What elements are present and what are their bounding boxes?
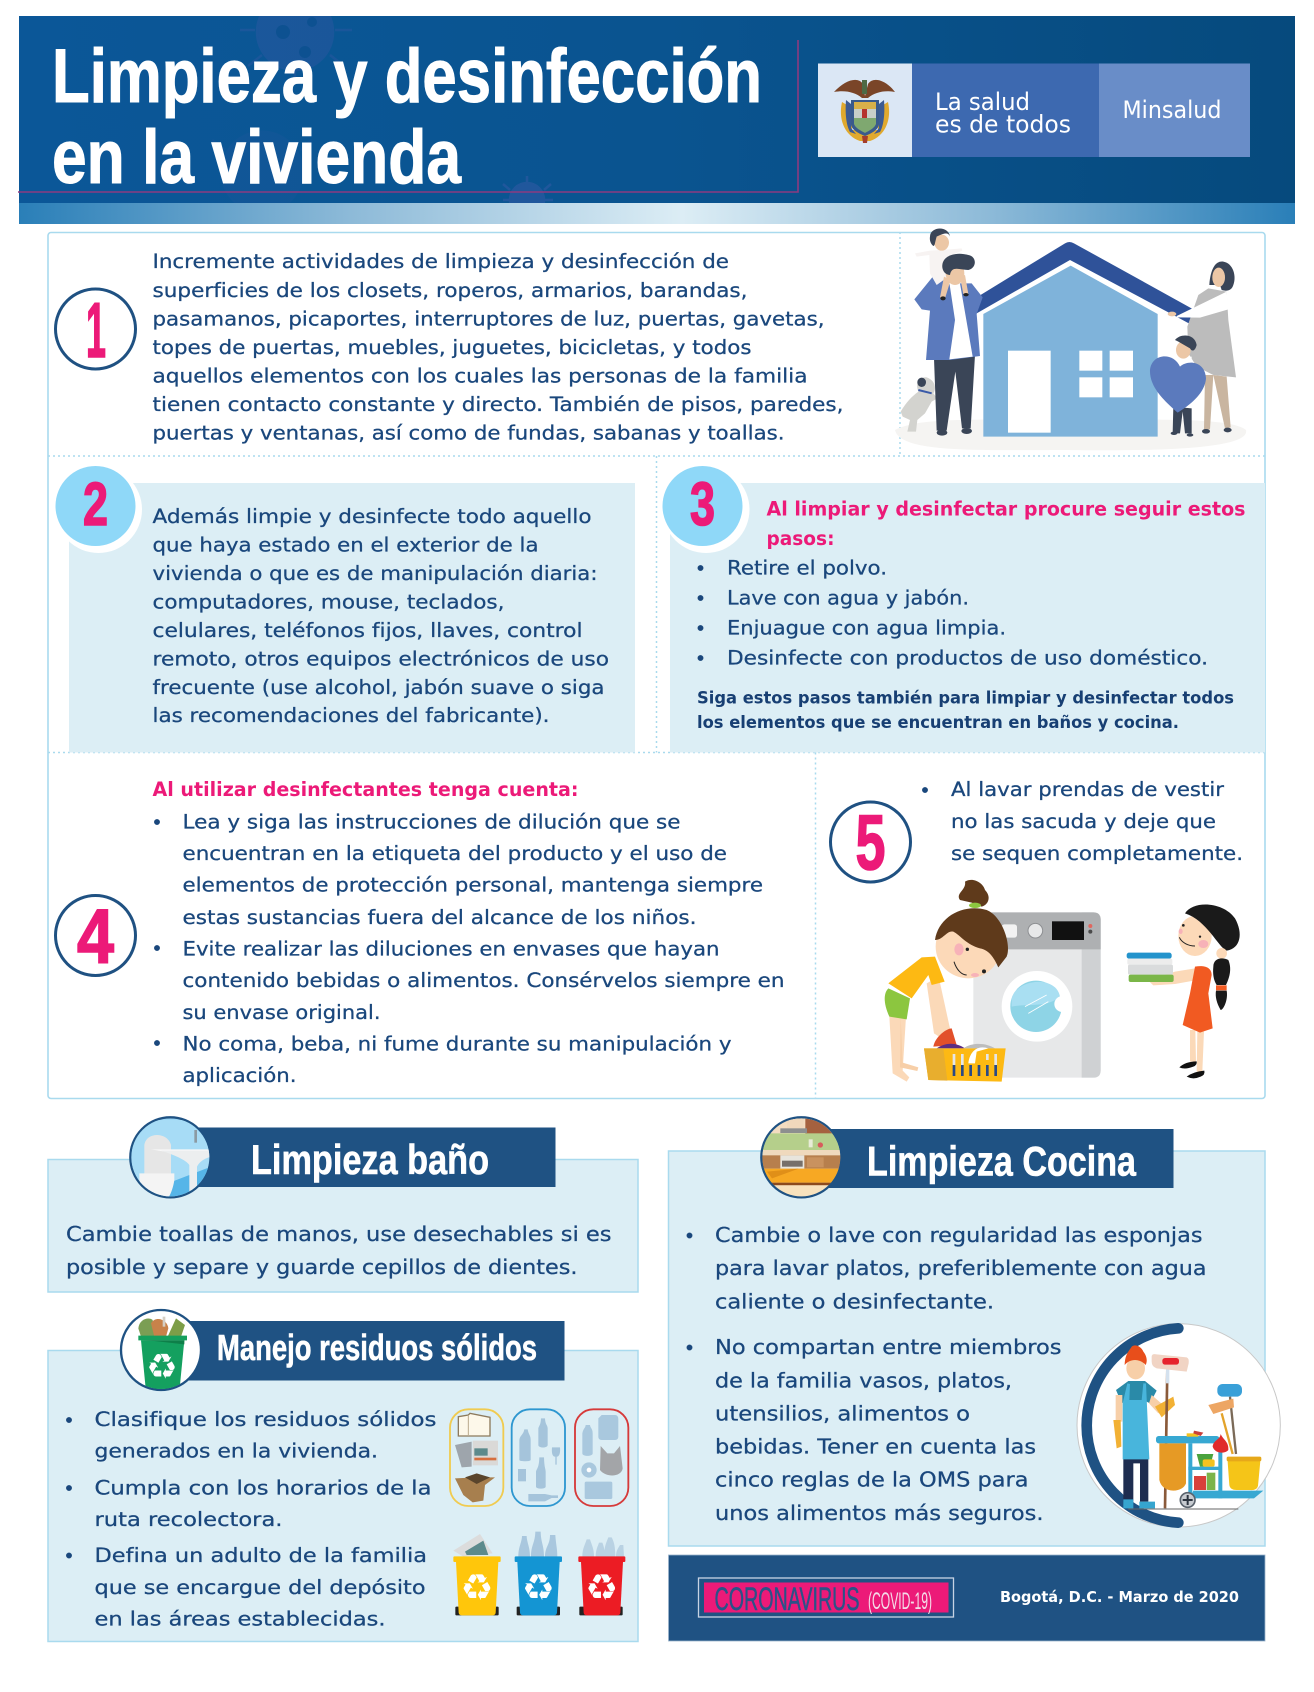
heading 3: Al limpiar y desinfectar procure seguir estos bbox=[766, 498, 1246, 520]
list: cocina: de la familia vasos, platos, bbox=[715, 1368, 1012, 1392]
illustration: waste types and recycling bins: ♻ bbox=[522, 1566, 555, 1609]
number 1 badge: 1 bbox=[86, 286, 106, 374]
icon: virus decorations bbox=[240, 16, 553, 203]
panel 4 bbox=[56, 778, 784, 1087]
number 4 badge bbox=[56, 894, 136, 980]
text block 1: Incremente actividades de limpieza y desinfección de bbox=[152, 250, 729, 273]
list: cocina: utensilios, alimentos o bbox=[715, 1402, 970, 1426]
note 3 bbox=[697, 688, 1234, 732]
icon: kitchen bbox=[760, 1117, 844, 1199]
list 4: encuentran en la etiqueta del producto y el uso de bbox=[182, 842, 727, 865]
footer bar bbox=[668, 1555, 1265, 1641]
icon: organic waste bin bbox=[121, 1310, 201, 1392]
number 5 badge bbox=[830, 798, 910, 886]
text block 5: se sequen completamente. bbox=[951, 842, 1243, 865]
list 4: su envase original. bbox=[182, 1001, 380, 1024]
note 3: los elementos que se encuentran en baños y cocina. bbox=[697, 713, 1179, 732]
note 3: Siga estos pasos también para limpiar y desinfectar todos bbox=[697, 688, 1234, 708]
number 3 badge bbox=[662, 466, 750, 553]
text block 2: computadores, mouse, teclados, bbox=[152, 590, 504, 614]
text block 1: pasamanos, picaportes, interruptores de luz, puertas, gavetas, bbox=[152, 307, 825, 330]
panel 5 bbox=[830, 778, 1243, 1082]
list: residuos: que se encargue del depósito bbox=[94, 1576, 426, 1599]
main content frame bbox=[48, 229, 1265, 1098]
heading 3 bbox=[766, 498, 1246, 550]
text block 2: frecuente (use alcohol, jabón suave o siga bbox=[152, 676, 604, 699]
title: en la vivienda bbox=[52, 115, 462, 200]
list: cocina: para lavar platos, preferiblemente con agua bbox=[715, 1256, 1206, 1280]
list: residuos: generados en la vivienda. bbox=[94, 1440, 378, 1462]
heading bar: Manejo residuos sólidos bbox=[180, 1321, 564, 1380]
title bbox=[52, 34, 762, 200]
heading bar: Limpieza baño: Limpieza baño bbox=[251, 1136, 489, 1183]
logo block: Minsalud: La salud bbox=[935, 88, 1030, 116]
list: residuos bbox=[66, 1408, 436, 1630]
number 3 badge: 3 bbox=[690, 470, 715, 538]
list: cocina bbox=[687, 1223, 1206, 1525]
list 4: aplicación. bbox=[182, 1064, 296, 1087]
panel 2 bbox=[55, 466, 635, 752]
text: baño: posible y separe y guarde cepillos de dientes. bbox=[66, 1255, 578, 1279]
text block 1 bbox=[152, 250, 844, 444]
heading bar: Manejo residuos sólidos: Manejo residuos sólidos bbox=[217, 1327, 537, 1368]
text block 2: celulares, teléfonos fijos, llaves, control bbox=[152, 619, 582, 642]
logo block: Minsalud: es de todos bbox=[935, 110, 1071, 138]
illustration: waste types and recycling bins: ♻ bbox=[585, 1566, 618, 1609]
coronavirus label: CORONAVIRUS bbox=[714, 1581, 860, 1617]
text block 2 bbox=[152, 505, 609, 727]
text block 1: puertas y ventanas, así como de fundas, sabanas y toallas. bbox=[152, 422, 784, 444]
heading 4: Al utilizar desinfectantes tenga cuenta: bbox=[152, 778, 578, 801]
list: cocina: unos alimentos más seguros. bbox=[715, 1501, 1044, 1525]
logo block: Minsalud: Minsalud bbox=[1122, 96, 1222, 124]
number 2 badge: 2 bbox=[83, 470, 108, 538]
list 3: Enjuague con agua limpia. bbox=[727, 616, 1006, 640]
list: residuos: Defina un adulto de la familia bbox=[94, 1544, 427, 1567]
list 3: Lave con agua y jabón. bbox=[727, 586, 969, 610]
title: Limpieza y desinfección bbox=[52, 34, 762, 119]
panel: Limpieza baño bbox=[48, 1117, 638, 1292]
text block 5: Al lavar prendas de vestir bbox=[951, 778, 1225, 801]
list 4: No coma, beba, ni fume durante su manipulación y bbox=[182, 1032, 732, 1055]
number 4 badge: 4 bbox=[77, 894, 114, 980]
illustration: family and house bbox=[895, 229, 1246, 450]
text block 2: vivienda o que es de manipulación diaria: bbox=[152, 562, 598, 585]
number 1 badge bbox=[56, 286, 136, 374]
panel 3 bbox=[662, 466, 1265, 752]
text block 2: Además limpie y desinfecte todo aquello bbox=[152, 505, 592, 528]
list: cocina: caliente o desinfectante. bbox=[715, 1290, 994, 1314]
list: residuos: en las áreas establecidas. bbox=[94, 1608, 386, 1630]
text block 1: aquellos elementos con los cuales las personas de la familia bbox=[152, 364, 808, 388]
list 4: estas sustancias fuera del alcance de los niños. bbox=[182, 906, 696, 929]
number 2 badge bbox=[55, 466, 142, 553]
text block 5: no las sacuda y deje que bbox=[951, 810, 1216, 833]
title frame line bbox=[18, 40, 798, 192]
list: residuos: ruta recolectora. bbox=[94, 1508, 282, 1531]
illustration: waste types and recycling bins bbox=[450, 1409, 628, 1615]
icon: coat of arms bbox=[834, 80, 895, 143]
heading bar: Limpieza baño bbox=[190, 1128, 556, 1187]
illustration: cleaning person bbox=[1077, 1324, 1280, 1527]
list: cocina: cinco reglas de la OMS para bbox=[715, 1468, 1028, 1492]
footer date: Bogotá, D.C. - Marzo de 2020 bbox=[1000, 1588, 1239, 1606]
panel 1 bbox=[56, 229, 1246, 450]
text: baño bbox=[66, 1222, 612, 1279]
list 4: contenido bebidas o alimentos. Consérvelos siempre en bbox=[182, 969, 784, 992]
list 4: Lea y siga las instrucciones de dilución que se bbox=[182, 810, 680, 834]
text block 2: las recomendaciones del fabricante). bbox=[152, 704, 550, 727]
list: cocina: bebidas. Tener en cuenta las bbox=[715, 1434, 1036, 1458]
illustration: laundry bbox=[885, 880, 1240, 1082]
heading 3: pasos: bbox=[766, 527, 834, 550]
heading bar: Limpieza Cocina: Limpieza Cocina bbox=[867, 1138, 1137, 1184]
text: baño: Cambie toallas de manos, use desechables si es bbox=[66, 1222, 612, 1246]
logo block: Minsalud bbox=[818, 64, 1250, 157]
list 3: Desinfecte con productos de uso doméstico. bbox=[727, 646, 1208, 670]
list: residuos: Clasifique los residuos sólidos bbox=[94, 1408, 436, 1431]
heading bar: Limpieza Cocina bbox=[820, 1129, 1174, 1188]
icon: organic waste bin: ♻ bbox=[146, 1347, 178, 1387]
text block 2: que haya estado en el exterior de la bbox=[152, 534, 538, 556]
list: cocina: Cambie o lave con regularidad las esponjas bbox=[715, 1223, 1202, 1247]
list 4: elementos de protección personal, mantenga siempre bbox=[182, 874, 763, 896]
list 3: Retire el polvo. bbox=[727, 556, 887, 580]
number 5 badge: 5 bbox=[856, 798, 886, 886]
panel: Manejo residuos sólidos bbox=[48, 1310, 638, 1642]
header banner bbox=[18, 0, 1295, 224]
header gradient band bbox=[19, 203, 1295, 224]
text block 1: topes de puertas, muebles, juguetes, bicicletas, y todos bbox=[152, 336, 752, 359]
coronavirus label: (COVID-19) bbox=[868, 1588, 932, 1615]
icon: bathroom bbox=[130, 1117, 211, 1200]
list: residuos: Cumpla con los horarios de la bbox=[94, 1476, 432, 1500]
list: cocina: No compartan entre miembros bbox=[715, 1335, 1062, 1359]
text block 2: remoto, otros equipos electrónicos de uso bbox=[152, 648, 609, 670]
panel: Limpieza Cocina bbox=[668, 1117, 1280, 1546]
text block 1: superficies de los closets, roperos, armarios, barandas, bbox=[152, 279, 748, 302]
list 4 bbox=[154, 810, 784, 1087]
list 3 bbox=[698, 556, 1208, 670]
list 4: Evite realizar las diluciones en envases que hayan bbox=[182, 937, 720, 960]
illustration: waste types and recycling bins: ♻ bbox=[461, 1566, 493, 1609]
text block 5 bbox=[922, 778, 1243, 865]
text block 1: tienen contacto constante y directo. También de pisos, paredes, bbox=[152, 393, 844, 416]
